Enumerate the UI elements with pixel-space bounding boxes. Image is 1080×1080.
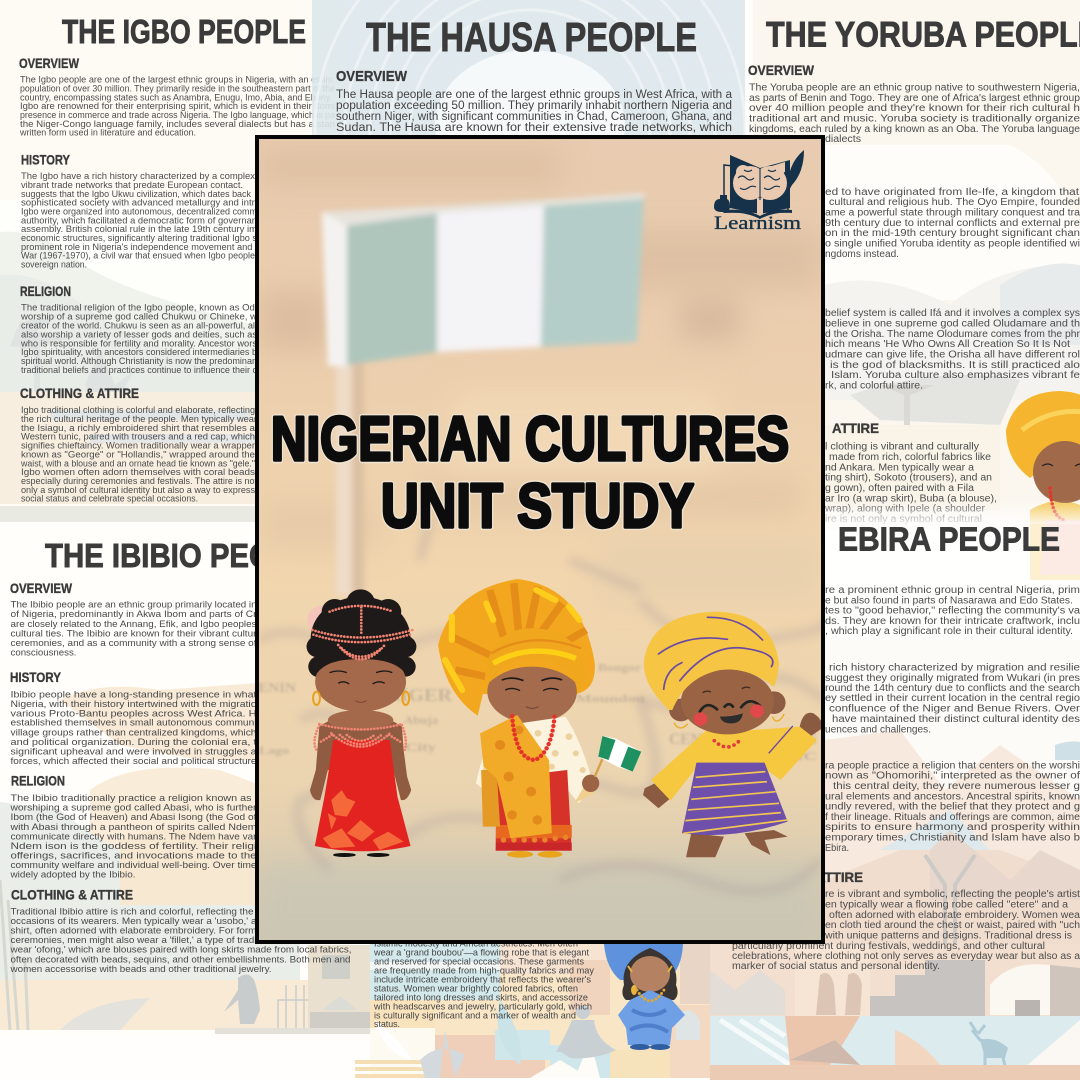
- text block: Ebira overview: ds. They are known for their intricate craftwork, inclu: [825, 616, 1080, 627]
- text block: Igbo clothing: social status and celebrate special occasions.: [21, 494, 198, 504]
- text block: Ibibio overview: consciousness.: [10, 647, 76, 658]
- text block: Igbo overview: [19, 75, 335, 138]
- text block: Ibibio overview: cultural ties. The Ibibio are known for their vibrant cultur: [10, 627, 256, 638]
- text block: Hausa clothing: [373, 939, 594, 1029]
- text block: Yoruba religion: Islam. Yoruba culture also emphasizes vibrant fe: [831, 370, 1080, 381]
- text block: Ibibio clothing: Traditional Ibibio attire is rich and colorful, reflecting the: [10, 905, 254, 916]
- text block: Hausa overview: [336, 89, 733, 134]
- text block: Igbo history: suggests that the Igbo Ukwu civilization, which dates back: [21, 189, 252, 199]
- heading: Religion: RELIGION: [11, 773, 65, 788]
- text block: Igbo religion: traditional beliefs and practices continue to influence their c: [21, 365, 258, 375]
- text block: Hausa overview: population exceeding 50 million. They primarily inhabit northern Nigeria and: [336, 100, 732, 112]
- text block: Hausa overview: southern Niger, with significant communities in Chad, Cameroon, Ghana, and: [336, 111, 732, 123]
- text block: Igbo history: prominent role in Nigeria's independence movement and i: [21, 242, 257, 252]
- text block: Yoruba clothing: ar Iro (a wrap skirt), Buba (a blouse),: [825, 493, 997, 504]
- logo wordmark: Learnism: [714, 213, 801, 234]
- text block: Yoruba religion: believe in one supreme god called Oludamare and th: [825, 318, 1080, 329]
- text block: Hausa overview: The Hausa people are one of the largest ethnic groups in West Africa, with a: [336, 89, 733, 101]
- title: Nigerian Cultures Unit Study: [271, 405, 789, 541]
- heading: The Ibibio People: THE IBIBIO PEOPLE: [45, 537, 329, 574]
- text block: Ebira overview: tes to "good behavior," reflecting the community's va: [825, 606, 1080, 616]
- text block: Igbo clothing: signifies chieftaincy. Women traditionally wear a wrapper: [21, 441, 255, 451]
- text block: Igbo history: assembly. British colonial rule in the late 19th century im: [21, 224, 257, 234]
- text block: Hausa clothing: wear a 'grand boubou'—a flowing robe that is elegant: [373, 948, 589, 958]
- text block: Igbo religion: spiritual world. Although Christianity is now the predominan: [21, 356, 257, 366]
- text block: Igbo history: [21, 171, 258, 270]
- cover background: blurred map photo: REPUBLIC: [720, 749, 817, 763]
- text block: Ebira history: uences and challenges.: [825, 724, 931, 735]
- text block: Yoruba religion: is the god of blacksmiths. It is still practiced alo: [830, 360, 1080, 371]
- text block: Ebira clothing: re is vibrant and symbolic, reflecting the people's artist: [825, 889, 1080, 900]
- text block: Ebira religion: f their lineage. Rituals and offerings are common, aime: [825, 812, 1080, 823]
- text block: Igbo history: The Igbo have a rich history characterized by a complex: [21, 171, 256, 181]
- text block: Ibibio history: Nigeria, with their history intertwined with the migratio: [10, 698, 256, 709]
- text block: Ebira religion: undly revered, with the belief that they protect and g: [825, 802, 1080, 813]
- stripes: [355, 1060, 435, 1078]
- text block: Yoruba religion: udmare can give life, the Orisha all have different rol: [825, 349, 1080, 360]
- text block: Yoruba history: o single unified Yoruba identity as people identified wi: [825, 239, 1080, 250]
- cover background: blurred map photo: CENTRAL AFRICAN: [669, 731, 817, 748]
- text block: Yoruba religion: belief system is called Ifá and it involves a complex sys: [825, 308, 1080, 319]
- text block: Igbo overview: the Niger-Congo language family, includes several dialects but has a stan: [20, 119, 335, 129]
- icon: open book with brain, quill and ink pot: [714, 150, 804, 219]
- text block: Igbo history: sovereign nation.: [21, 260, 87, 270]
- text block: Yoruba religion: [825, 308, 1080, 391]
- text block: Ibibio religion: with Abasi through a pantheon of spirits called Ndem: [9, 821, 257, 832]
- text block: Ibibio religion: communicate directly with humans. The Ndem have var: [10, 830, 256, 841]
- photo: blurred Nigerian flag on toothpick: [322, 193, 644, 595]
- text block: Yoruba overview: traditional art and music. Yoruba society is traditionally organize: [749, 114, 1080, 125]
- text block: Yoruba overview: as parts of Benin and Togo. They are one of Africa's largest ethnic group: [749, 93, 1080, 104]
- text block: Yoruba clothing: ting shirt), Sokoto (trousers), and an: [825, 473, 992, 484]
- text block: Igbo history: authority, which facilitated a democratic form of governan: [21, 216, 257, 226]
- text block: Ibibio clothing: women accessorise with beads and other traditional jewelry.: [9, 963, 272, 974]
- text block: Hausa clothing: with headscarves and jewelry, particularly gold, which: [373, 1001, 592, 1011]
- text block: Ebira religion: spirits to ensure harmony and prosperity within: [825, 822, 1080, 833]
- text block: Ebira clothing: en cloth tied around the chest or waist, paired with "uch: [825, 920, 1080, 931]
- text block: Igbo overview: presence in commerce and trade across Nigeria. The Igbo language, which is pa: [20, 110, 335, 120]
- text block: Igbo clothing: only a symbol of cultural identity but also a way to express: [21, 485, 256, 495]
- panel: The Ibibio People page: [0, 522, 370, 1035]
- text block: Igbo religion: also worship a variety of lesser gods and deities, such as: [21, 330, 258, 340]
- title: Nigerian Cultures Unit Study: UNIT STUDY: [381, 472, 694, 541]
- text block: Yoruba history: 9th century due to internal conflicts and external pre: [825, 218, 1080, 229]
- text block: Ibibio history: various Proto-Bantu peoples across West Africa. H: [10, 707, 256, 718]
- text block: Igbo overview: Igbo are renowned for their enterprising spirit, which is evident in their domi: [20, 101, 335, 111]
- icon: standing figures: [816, 973, 862, 1015]
- text block: Ibibio history: forces, which affected their social and political structure: [10, 755, 256, 766]
- text block: Ebira history: [825, 662, 1080, 735]
- text block: Igbo history: vibrant trade networks that predate European contact.: [21, 180, 243, 190]
- text block: Yoruba clothing: [824, 442, 997, 525]
- text block: Igbo religion: worship of a supreme god called Chukwu or Chineke, w: [20, 312, 258, 322]
- title: Nigerian Cultures Unit Study: NIGERIAN CULTURES: [271, 405, 789, 474]
- cover background: blurred map photo: Bongor: [598, 662, 641, 674]
- text block: Ebira history: ey settled in their current location in the central regio: [825, 693, 1080, 704]
- text block: Yoruba history: ame a powerful state through military conquest and tra: [825, 208, 1080, 219]
- text block: Ibibio religion: Ibom (the God of Heaven) and Abasi Isong (the God of: [10, 811, 257, 822]
- icon: stepped building: [870, 960, 985, 1016]
- text block: Igbo overview: written form used in literature and education.: [19, 128, 196, 138]
- heading: The Ebira People: EBIRA PEOPLE: [838, 520, 1060, 558]
- text block: Igbo overview: The Igbo people are one of the largest ethnic groups in Nigeria, with an estim: [20, 75, 333, 85]
- text block: Yoruba overview: over 40 million people and they're known for their rich cultural h: [749, 103, 1080, 114]
- text block: Ebira religion: emporary times, Christianity and Islam have also b: [825, 832, 1080, 843]
- text block: Ibibio clothing: wear 'ofong,' which are blouses paired with long skirts made from local fabrics,: [9, 944, 351, 955]
- text block: Ebira overview: [825, 585, 1080, 637]
- icon: deer: [970, 1022, 1006, 1070]
- text block: Yoruba history: [825, 187, 1080, 260]
- text block: Ibibio religion: community welfare and individual well-being. Over time: [10, 859, 256, 870]
- heading: The Hausa People: THE HAUSA PEOPLE: [366, 14, 697, 60]
- text block: Ebira history: rich history characterized by migration and resilie: [829, 662, 1080, 673]
- text block: Ibibio religion: offerings, sacrifices, and invocations made to the: [10, 849, 256, 860]
- heading: The Igbo People: THE IGBO PEOPLE: [62, 13, 306, 50]
- logo: Learnism: [714, 150, 804, 234]
- text block: Yoruba history: ngdoms instead.: [825, 249, 899, 260]
- text block: Igbo religion: [20, 303, 258, 375]
- icon: girl in red dress: [307, 589, 416, 857]
- text block: Hausa clothing: tailored into long dresses and skirts, and accessorize: [374, 992, 588, 1002]
- text block: Ebira clothing: often adorned with elaborate embroidery. Women wea: [829, 910, 1080, 921]
- panel: The Yoruba People page: [748, 0, 1080, 580]
- text block: Ebira clothing: en typically wear a flowing robe called "etere" and a: [825, 899, 1068, 910]
- heading: Clothing and attire: CLOTHING & ATTIRE: [20, 386, 139, 401]
- text block: Ebira religion: ra people practice a religion that centers on the worshi: [825, 760, 1080, 772]
- icon: seated figure: [556, 1005, 616, 1058]
- text block: Igbo history: economic structures, significantly altering traditional Igbo s: [21, 233, 258, 243]
- text block: Ibibio overview: [10, 598, 257, 658]
- icon: smiling woman in yellow and purple: [643, 612, 822, 857]
- text block: Igbo religion: who is responsible for fertility and morality. Ancestor wors: [20, 338, 258, 348]
- text block: Ebira history: round the 14th century due to conflicts and the search: [825, 683, 1080, 694]
- text block: Ibibio history: Ibibio people have a long-standing presence in what: [10, 688, 257, 699]
- cover background: blurred map photo: [255, 135, 826, 945]
- heading: Overview: OVERVIEW: [748, 63, 814, 78]
- text block: Igbo religion: Igbo spirituality, with ancestors considered intermediaries b: [21, 347, 257, 357]
- text block: Igbo clothing: [20, 405, 258, 504]
- icon: standing figure: [224, 974, 260, 1024]
- text block: Ibibio history: significant upheaval and were involved in struggles a: [10, 746, 257, 756]
- text block: Ibibio overview: The Ibibio people are an ethnic group primarily located in: [10, 598, 256, 610]
- heading: History: HISTORY: [10, 670, 61, 685]
- text block: Ibibio clothing: shirt, often adorned with elaborate embroidery. For form: [10, 925, 257, 936]
- text block: Ebira religion: ural elements and ancestors. Ancestral spirits, known: [825, 791, 1080, 802]
- text block: Ibibio religion: widely adopted by the Ibibio.: [9, 869, 136, 880]
- text block: Yoruba clothing: g gown), often paired with a Fila: [825, 483, 974, 494]
- text block: Yoruba overview: [749, 83, 1080, 145]
- cover background: blurred map photo: Abuja: [404, 713, 438, 727]
- text block: Igbo clothing: especially during ceremonies and festivals. The attire is not: [21, 476, 258, 486]
- text block: Ebira overview: , which play a significant role in their cultural identity.: [825, 626, 1073, 637]
- icon: round hut: [990, 964, 1080, 1016]
- heading: Clothing and attire: ATTIRE: [832, 421, 879, 436]
- text block: Hausa clothing: include intricate embroidery that reflects the wearer's: [374, 974, 591, 984]
- heading: Overview: OVERVIEW: [10, 581, 72, 596]
- text block: Hausa overview: Sudan. The Hausa are known for their extensive trade networks, which: [336, 122, 732, 134]
- text block: Yoruba history: cultural and religious hub. The Oyo Empire, founded: [829, 197, 1080, 208]
- title: Nigerian Cultures Unit Study: NIGERIAN CULTURES: [271, 405, 789, 474]
- panel: The Ebira People page: [710, 520, 1080, 1080]
- icon: fence: [278, 985, 312, 1030]
- text block: Ibibio religion: [9, 792, 257, 880]
- cover background: blurred map photo: Moundou: [576, 693, 645, 705]
- text block: Ebira religion: nown as "Ohomorihi," interpreted as the owner of: [825, 771, 1080, 782]
- text block: Ibibio overview: are closely related to the Annang, Efik, and Igbo peoples: [10, 618, 257, 629]
- cover background: blurred map photo: City: [405, 740, 436, 754]
- panel: Hausa clothing page bottom: [355, 939, 710, 1078]
- icon: Hausa woman in blue: [604, 944, 685, 1050]
- text block: Ebira overview: re a prominent ethnic group in central Nigeria, prim: [825, 585, 1080, 596]
- text block: Hausa clothing: Islamic modesty and African aesthetics. Men often: [374, 939, 578, 949]
- text block: Ebira religion: this central deity, they revere numerous lesser g: [833, 781, 1080, 792]
- text block: Ibibio history: and political organization. During the colonial era, t: [10, 736, 257, 747]
- text block: Ebira religion: [825, 760, 1080, 854]
- text block: Ibibio clothing: occasions of its wearers. Men typically wear a 'usobo,' a: [10, 915, 257, 926]
- panel: The Igbo People page: [0, 0, 345, 522]
- text block: Yoruba clothing: nd Ankara. Men typically wear a: [825, 462, 974, 473]
- text block: Igbo overview: country, encompassing states such as Anambra, Enugu, Imo, Abia, and Ebony.: [20, 92, 332, 102]
- title: Nigerian Cultures Unit Study: UNIT STUDY: [381, 472, 694, 541]
- text block: Yoruba history: on in the mid-19th century brought significant chan: [825, 228, 1080, 239]
- text block: Ibibio history: established themselves in small autonomous communi: [10, 717, 256, 728]
- panel: cover card: [255, 135, 826, 945]
- heading: Religion: RELIGION: [20, 284, 71, 299]
- text block: Igbo clothing: the rich cultural heritage of the people. Men typically wear: [21, 414, 257, 424]
- heading: Overview: OVERVIEW: [19, 56, 79, 71]
- text block: Yoruba religion: hich means 'He Who Owns All Creation So It Is Not: [825, 339, 1070, 350]
- text block: Hausa clothing: are frequently made from high-quality fabrics and may: [374, 966, 594, 976]
- text block: Ibibio history: village groups rather than centralized kingdoms, which: [10, 726, 256, 738]
- text block: Igbo religion: creator of the world. Chukwu is seen as an all-powerful, all: [21, 320, 257, 330]
- text block: Ebira clothing: [732, 889, 1080, 972]
- text block: Ibibio religion: Ndem ison is the goddess of fertility. Their religi: [10, 840, 256, 851]
- text block: Igbo history: War (1967-1970), a civil war that ensued when Igbo people: [21, 251, 255, 261]
- text block: Ebira history: suggest they originally migrated from Wukari (in pres: [825, 673, 1080, 684]
- text block: Ibibio overview: of Nigeria, predominantly in Akwa Ibom and parts of Cr: [10, 608, 256, 619]
- text block: Ebira clothing: celebrations, where clothing not only serves as everyday wear but also as a: [732, 951, 1080, 962]
- text block: Ibibio religion: The Ibibio traditionally practice a religion known as: [10, 792, 252, 803]
- text block: Yoruba religion: rk, and colorful attire.: [825, 380, 923, 391]
- characters group: [307, 579, 822, 858]
- text block: Ibibio clothing: often decorated with beads, sequins, and other embellishments. Both men and: [10, 954, 350, 964]
- text block: Ibibio clothing: [9, 905, 351, 974]
- heading: Overview: OVERVIEW: [336, 68, 408, 85]
- text block: Yoruba overview: dialects: [825, 134, 861, 145]
- text block: Igbo history: sophisticated society with advanced metallurgy and intri: [21, 198, 257, 208]
- text block: Yoruba history: ed to have originated from Ile-Ife, a kingdom that: [825, 187, 1079, 198]
- cover background: blurred map photo: Lago: [259, 746, 289, 757]
- heading: History: HISTORY: [21, 152, 70, 168]
- cover border: [257, 137, 823, 942]
- heading: Clothing and attire: ATTIRE: [816, 870, 863, 885]
- text block: Ibibio clothing: ceremonies, men might also wear a 'fillet,' a type of tradi: [10, 934, 256, 945]
- icon: woman in orange gele with flag: [438, 579, 641, 858]
- text block: Yoruba clothing: wrap), along with Ipele (a shoulder: [824, 504, 986, 515]
- text block: Igbo clothing: the Isiagu, a richly embroidered shirt that resembles a: [21, 423, 255, 433]
- text block: Hausa clothing: status. Women wear brightly colored fabrics, often: [374, 983, 578, 993]
- text block: Hausa clothing: status.: [374, 1019, 400, 1029]
- text block: Yoruba religion: d the Orisha. The name Olodumare comes from the phr: [825, 329, 1080, 340]
- text block: Ebira clothing: marker of social status and personal identity.: [732, 961, 940, 972]
- text block: Yoruba overview: The Yoruba people are an ethnic group native to southwestern Nigeria,: [749, 83, 1080, 94]
- text block: Igbo clothing: Igbo traditional clothing is colorful and elaborate, reflecting: [21, 405, 255, 415]
- text block: Ebira religion: Ebira.: [825, 843, 849, 854]
- text block: Hausa clothing: is culturally significant and a marker of wealth and: [374, 1010, 576, 1020]
- text block: Ibibio history: [10, 688, 257, 766]
- text block: Igbo history: Igbo were organized into autonomous, decentralized comm: [21, 206, 257, 216]
- text block: Ibibio overview: ceremonies, and as a community with a strong sense of: [10, 637, 257, 648]
- text block: Ebira overview: e but also found in parts of Nasarawa and Edo States.: [825, 595, 1073, 606]
- text block: Igbo clothing: Igbo women often adorn themselves with coral beads: [21, 467, 256, 477]
- text block: Yoruba clothing: made from rich, colorful fabrics like: [829, 452, 991, 463]
- icon: house: [215, 945, 370, 1034]
- text block: Ebira clothing: particularly prominent during festivals, weddings, and other cultural: [732, 941, 1045, 952]
- text block: Igbo religion: The traditional religion of the Igbo people, known as Odi: [21, 303, 257, 313]
- icon: arch: [676, 1010, 700, 1040]
- heading: Clothing and attire: CLOTHING & ATTIRE: [11, 887, 133, 902]
- text block: Igbo clothing: Western tunic, paired with trousers and a red cap, which: [21, 432, 255, 442]
- cover background: blurred map photo: NIGER: [386, 685, 453, 705]
- text block: Igbo clothing: waist, with a blouse and an ornate head tie known as "gele.": [20, 458, 255, 468]
- text block: Igbo clothing: known as "George" or "Hollandis," wrapped around the: [21, 449, 255, 459]
- text block: Hausa clothing: and reserved for special occasions. These garments: [374, 957, 584, 967]
- cover background: blurred map photo: ENIN: [258, 681, 296, 696]
- icon: Yoruba woman in gele: [1006, 391, 1080, 580]
- text block: Igbo overview: population of over 30 million. They primarily reside in the southeastern part of the: [20, 84, 335, 94]
- text block: Yoruba clothing: l clothing is vibrant and culturally: [825, 442, 979, 453]
- text block: Ebira clothing: with unique patterns and designs. Traditional dress is: [824, 930, 1072, 941]
- text block: Ebira history: have maintained their distinct cultural identity des: [832, 714, 1080, 725]
- panel: The Hausa People page: [312, 0, 745, 345]
- text block: Yoruba clothing: ire is not only a symbol of cultural: [825, 514, 982, 525]
- text block: Ibibio religion: worshiping a supreme god called Abasi, who is further: [9, 802, 256, 813]
- text block: Ebira history: confluence of the Niger and Benue Rivers. Over: [829, 704, 1080, 715]
- text block: Yoruba overview: kingdoms, each ruled by a king known as an Oba. The Yoruba language: [749, 124, 1080, 135]
